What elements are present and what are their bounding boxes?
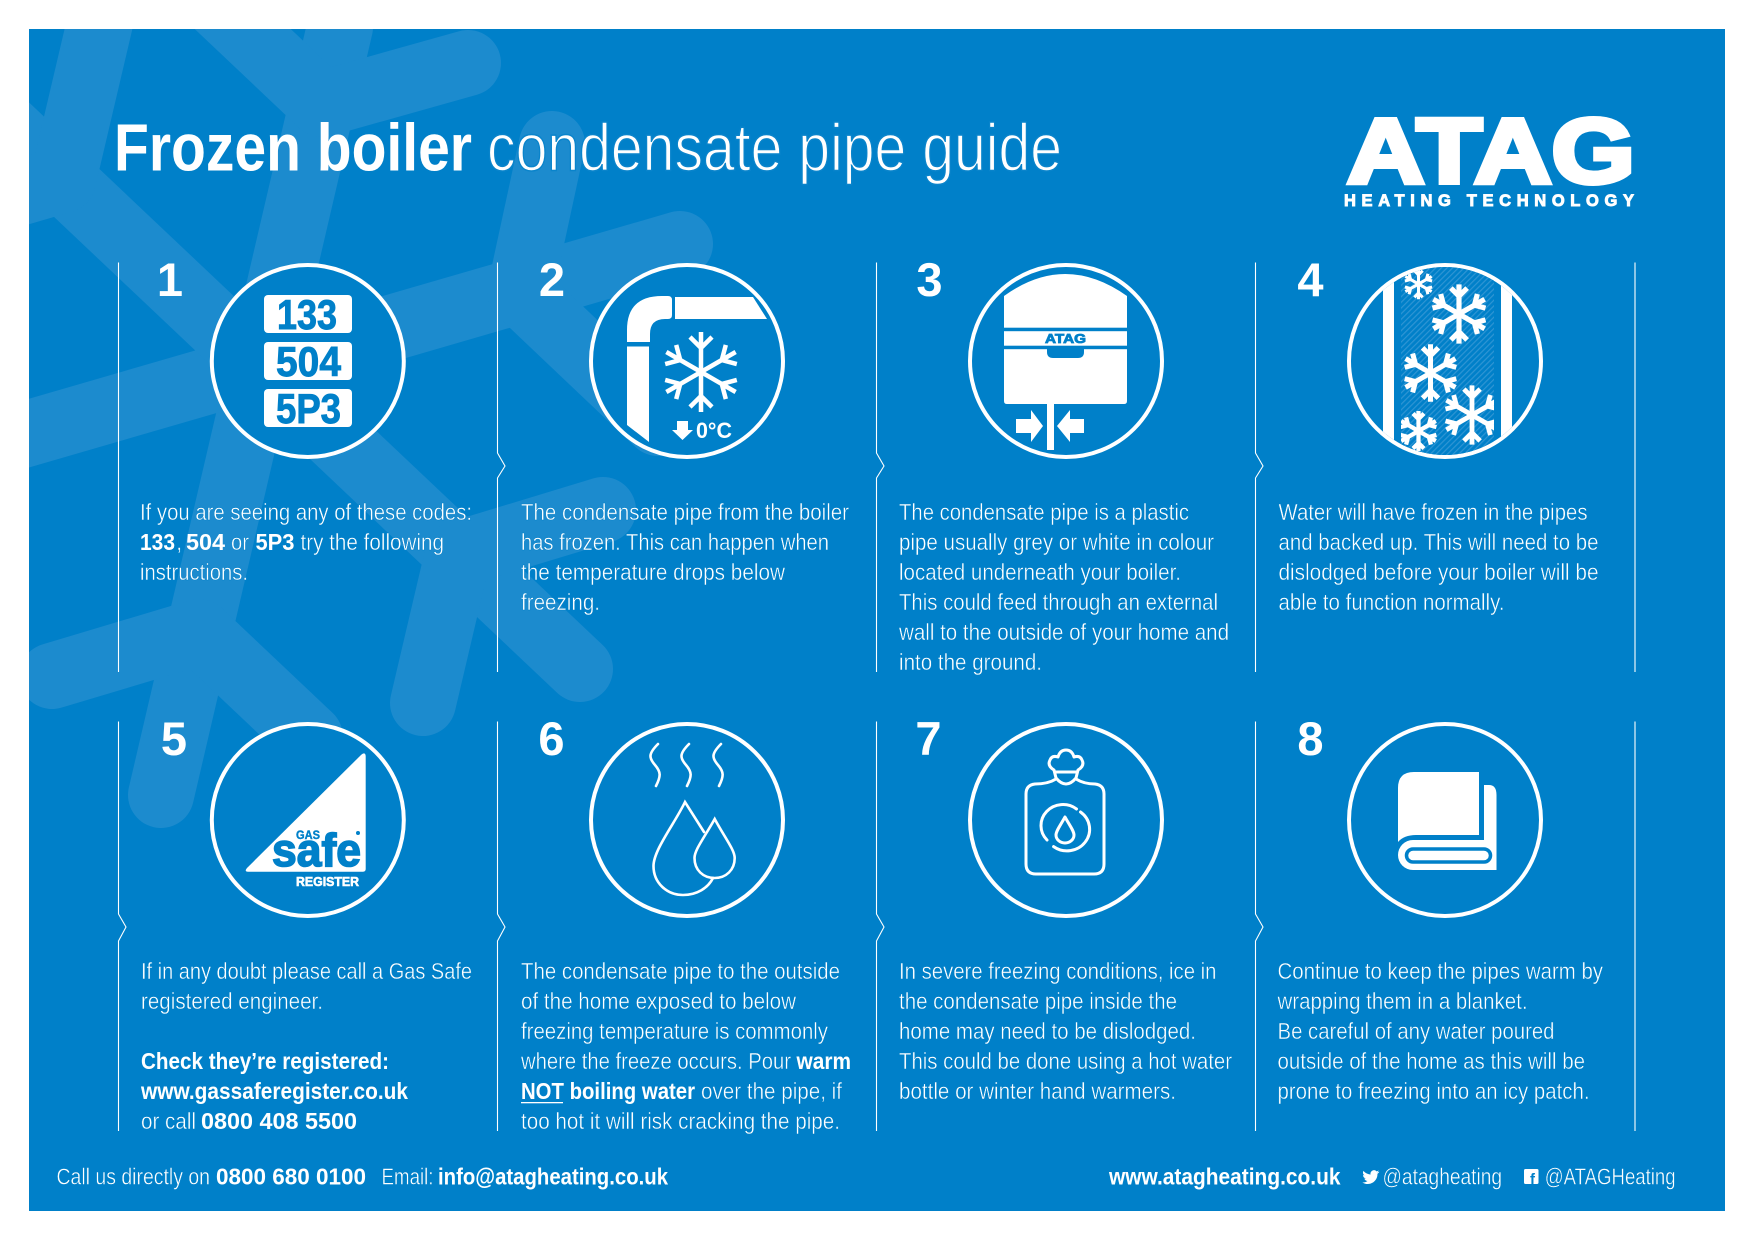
title: Frozen boiler: [114, 110, 472, 186]
number 1: 1: [157, 253, 183, 306]
step 5 text: Check they’re registered:: [141, 1048, 389, 1074]
number 7: 7: [915, 712, 942, 765]
icon: boiler with condensate pipe: [970, 265, 1162, 457]
number 3: 3: [916, 253, 943, 306]
footer: contact details: info@atagheating.co.uk: [438, 1164, 668, 1190]
panel: step 5: [140, 712, 472, 1134]
icon: fault codes: [212, 265, 404, 457]
step 7 text: [899, 958, 1232, 1104]
number 2: 2: [539, 253, 565, 306]
step 1 text: [140, 499, 472, 585]
number 4: 4: [1297, 253, 1324, 306]
step 3 text: located underneath your boiler.: [899, 559, 1181, 585]
background snowflake watermark: [0, 0, 680, 795]
panel: step 2: [521, 253, 849, 615]
step 5 text: www.gassaferegister.co.uk: [140, 1078, 408, 1104]
step 3 text: wall to the outside of your home and: [898, 619, 1229, 645]
icon: Gas Safe register logo: GAS: [296, 828, 320, 842]
icon: fault codes: 133: [277, 291, 337, 338]
icon: boiler with condensate pipe: ATAG: [1045, 332, 1086, 346]
step 2 text: freezing.: [521, 589, 600, 615]
icon: fault codes: 504: [276, 338, 342, 385]
step 1 text: 133: [140, 529, 175, 555]
step 5 text: 0800 408 5500: [201, 1108, 357, 1134]
step 4 text: Water will have frozen in the pipes: [1278, 499, 1588, 525]
step 7 text: home may need to be dislodged.: [899, 1018, 1196, 1044]
icon: folded blanket: [1349, 724, 1541, 916]
step 3 text: The condensate pipe is a plastic: [899, 499, 1189, 525]
step 5 text: or call: [141, 1108, 196, 1134]
step 6 text: NOT boiling water: [521, 1078, 695, 1104]
step 1 text: or: [231, 529, 249, 555]
icon: facebook: f: [1530, 1171, 1536, 1188]
panel: step 8: [1277, 712, 1603, 1104]
ATAG logo: HEATING TECHNOLOGY: [1344, 192, 1634, 210]
icon: Gas Safe register logo: safe: [272, 824, 361, 876]
step 1 text: try the following: [300, 529, 444, 555]
footer: website and social: www.atagheating.co.uk: [1108, 1164, 1341, 1190]
step 7 text: the condensate pipe inside the: [899, 988, 1177, 1014]
step 2 text: The condensate pipe from the boiler: [521, 499, 849, 525]
panel: step 6: [520, 712, 851, 1134]
panel: step 3: [898, 253, 1229, 675]
icon: warm water drops and steam: [591, 724, 783, 916]
step 4 text: dislodged before your boiler will be: [1278, 559, 1598, 585]
panel: step 1: [140, 253, 472, 585]
icon: Gas Safe register logo: [212, 724, 404, 916]
step 3 text: into the ground.: [899, 649, 1042, 675]
step 6 text: where the freeze occurs. Pour: [520, 1048, 791, 1074]
step 4 text: able to function normally.: [1278, 589, 1504, 615]
step 3 text: This could feed through an external: [899, 589, 1218, 615]
step 1 text: ,: [176, 529, 182, 555]
step 8 text: prone to freezing into an icy patch.: [1278, 1078, 1590, 1104]
ATAG logo: ATAG: [1347, 100, 1635, 202]
step 8 text: Continue to keep the pipes warm by: [1278, 958, 1603, 984]
step 5 text: [140, 958, 472, 1134]
step 1 text: 504: [186, 529, 225, 555]
number 6: 6: [538, 712, 565, 765]
step 6 text: The condensate pipe to the outside: [521, 958, 840, 984]
title: [114, 110, 1062, 186]
step 8 text: Be careful of any water poured: [1278, 1018, 1554, 1044]
icon: facebook: [1524, 1169, 1538, 1188]
footer: website and social: @atagheating: [1382, 1164, 1502, 1190]
step 6 text: freezing temperature is commonly: [521, 1018, 828, 1044]
step 3 text: [898, 499, 1229, 675]
icon: snow in pipe: [1349, 255, 1541, 465]
icon: twitter bird: [1362, 1170, 1379, 1184]
step 6 text: warm: [796, 1048, 851, 1074]
footer: website and social: [1108, 1164, 1676, 1190]
title: condensate pipe guide: [487, 110, 1062, 186]
panel: step 7: [899, 712, 1232, 1104]
footer: contact details: Call us directly on: [56, 1164, 210, 1190]
step 7 text: In severe freezing conditions, ice in: [899, 958, 1216, 984]
footer: contact details: Email:: [382, 1164, 434, 1190]
step 4 text: [1278, 499, 1598, 615]
footer: contact details: 0800 680 0100: [216, 1164, 366, 1190]
panel: step 4: [1278, 253, 1598, 615]
step 7 text: bottle or winter hand warmers.: [899, 1078, 1176, 1104]
step 4 text: and backed up. This will need to be: [1278, 529, 1598, 555]
step 7 text: This could be done using a hot water: [899, 1048, 1232, 1074]
step 5 text: If in any doubt please call a Gas Safe: [141, 958, 472, 984]
step 2 text: the temperature drops below: [521, 559, 785, 585]
step 1 text: instructions.: [140, 559, 248, 585]
step 8 text: [1277, 958, 1603, 1104]
step 2 text: [521, 499, 849, 615]
icon: fault codes: 5P3: [276, 385, 341, 432]
step 5 text: registered engineer.: [141, 988, 323, 1014]
number 5: 5: [161, 712, 187, 765]
icon: Gas Safe register logo: REGISTER: [296, 874, 360, 889]
step 6 text: too hot it will risk cracking the pipe.: [521, 1108, 840, 1134]
step 6 text: over the pipe, if: [701, 1078, 843, 1104]
number 8: 8: [1297, 712, 1324, 765]
step 2 text: has frozen. This can happen when: [521, 529, 829, 555]
step 8 text: outside of the home as this will be: [1278, 1048, 1585, 1074]
step 6 text: [520, 958, 851, 1134]
footer: contact details: [56, 1164, 668, 1190]
icon: hot water bottle: [970, 724, 1162, 916]
step 3 text: pipe usually grey or white in colour: [899, 529, 1214, 555]
icon: frozen pipe: 0°C: [696, 418, 732, 443]
icon: frozen pipe: [591, 265, 783, 457]
step 1 text: If you are seeing any of these codes:: [140, 499, 472, 525]
step 6 text: of the home exposed to below: [521, 988, 796, 1014]
step 8 text: wrapping them in a blanket.: [1277, 988, 1528, 1014]
footer: website and social: @ATAGHeating: [1545, 1164, 1676, 1190]
step 1 text: 5P3: [256, 529, 294, 555]
